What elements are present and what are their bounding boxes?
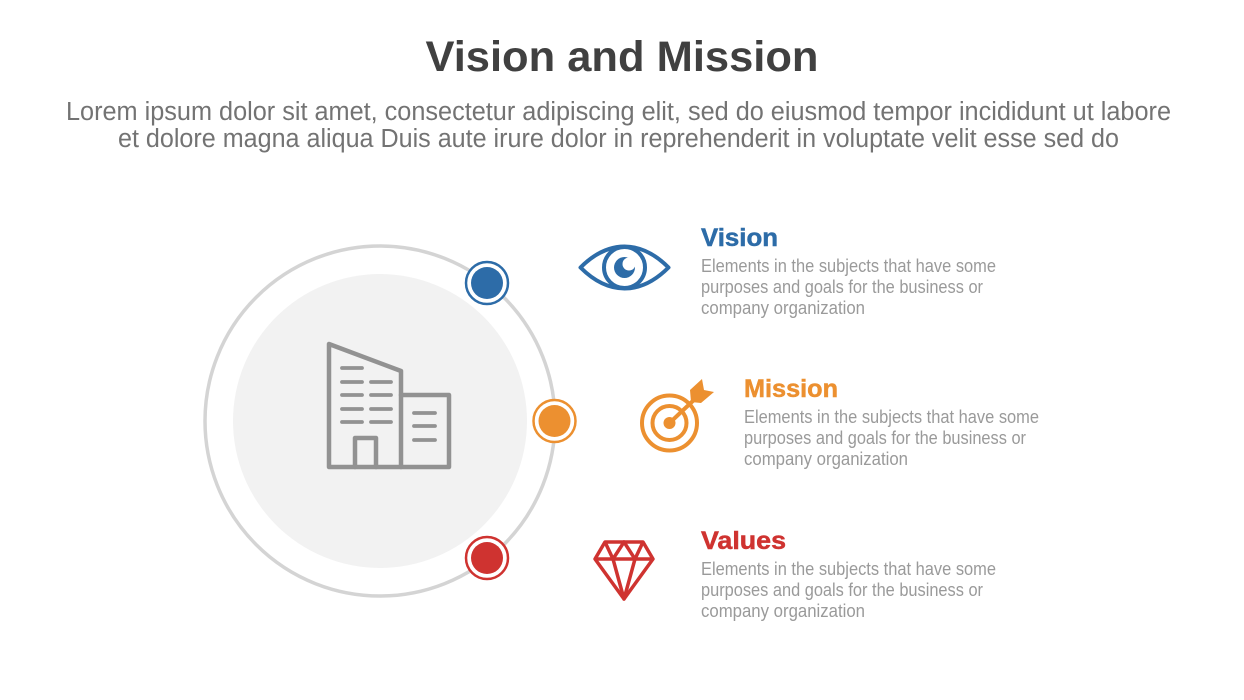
vision text	[701, 224, 996, 318]
marker: values	[466, 537, 508, 579]
values text	[701, 527, 996, 621]
icon: diamond	[595, 542, 653, 599]
icon: eye	[580, 246, 668, 288]
inner circle	[233, 274, 527, 568]
mission text: Elements in the subjects that have some	[744, 406, 1039, 427]
values text: company organization	[701, 600, 865, 621]
icon: building	[329, 344, 449, 467]
values text: purposes and goals for the business or	[701, 579, 983, 600]
mission text: Mission	[744, 375, 838, 403]
marker: mission	[534, 400, 576, 442]
subtitle: et dolore magna aliqua Duis aute irure dolor in reprehenderit in voluptate velit esse sed do	[118, 125, 1119, 153]
outer ring	[205, 246, 555, 596]
values text: Elements in the subjects that have some	[701, 558, 996, 579]
marker: vision	[466, 262, 508, 304]
mission text	[744, 375, 1039, 469]
title: Vision and Mission	[426, 33, 818, 81]
values text: Values	[701, 527, 786, 555]
vision text: purposes and goals for the business or	[701, 276, 983, 297]
vision text: company organization	[701, 297, 865, 318]
vision text: Elements in the subjects that have some	[701, 255, 996, 276]
mission text: purposes and goals for the business or	[744, 427, 1026, 448]
subtitle	[66, 98, 1171, 153]
mission text: company organization	[744, 448, 908, 469]
icon: target	[642, 379, 714, 450]
vision text: Vision	[701, 224, 778, 252]
subtitle: Lorem ipsum dolor sit amet, consectetur adipiscing elit, sed do eiusmod tempor incididunt ut labore	[66, 98, 1171, 126]
